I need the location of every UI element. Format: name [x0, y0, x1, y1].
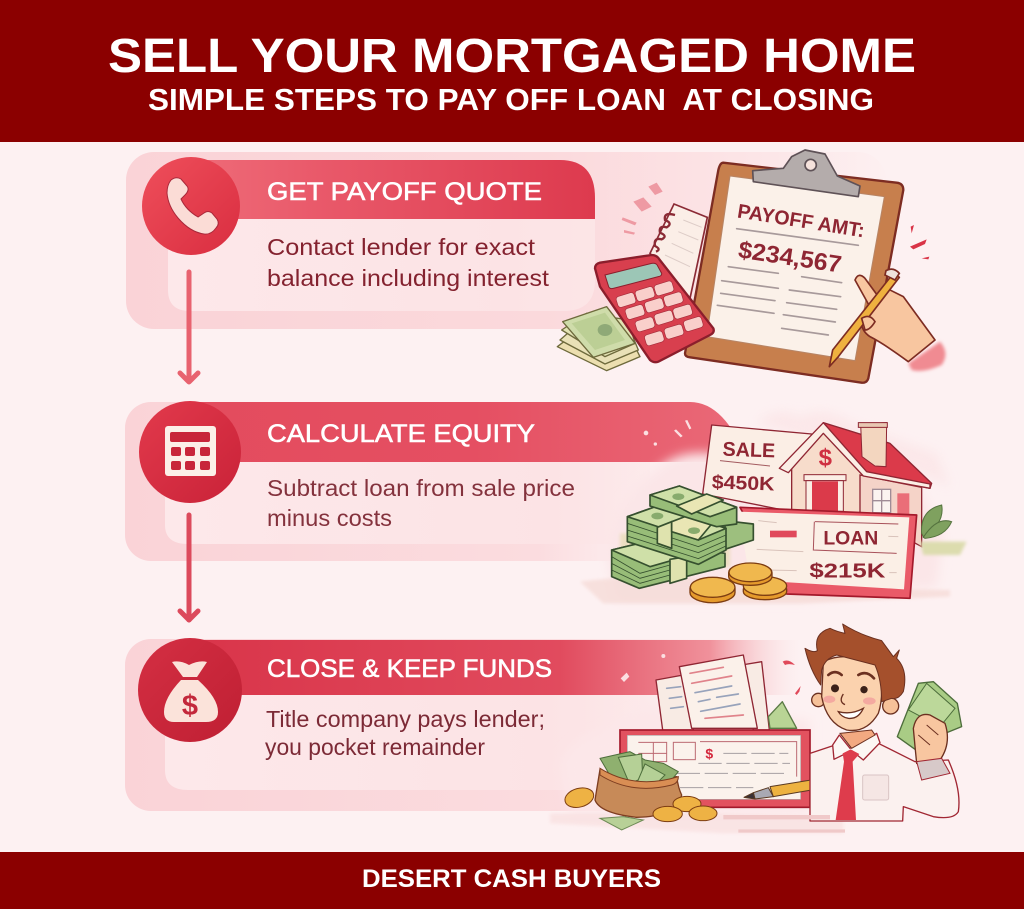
panel 1 description: Contact lender for exact [267, 234, 536, 260]
panel: step 3 close and keep funds [125, 638, 800, 811]
footer banner [0, 852, 1024, 909]
subtitle: SIMPLE STEPS TO PAY OFF LOAN AT CLOSING [148, 82, 874, 117]
panel 3 description: you pocket remainder [265, 734, 485, 760]
check [620, 730, 810, 807]
house [779, 423, 932, 547]
red calculator [595, 255, 714, 362]
cash stacks [612, 486, 753, 588]
motion marks [783, 661, 801, 695]
panel 2 description: minus costs [267, 505, 392, 531]
house: $ [819, 445, 832, 472]
panel 2 description [267, 475, 575, 531]
face and hair [805, 624, 905, 748]
desk shadow [723, 815, 845, 833]
panel 1 description [267, 234, 550, 291]
documents [656, 655, 797, 730]
arrow: step 1 to step 2 [180, 272, 198, 382]
panel 3 body card [165, 690, 640, 790]
panel 2 backing [125, 402, 715, 561]
pen [744, 779, 816, 799]
panel 3 description: Title company pays lender; [266, 706, 545, 732]
panel 2 heading: CALCULATE EQUITY [267, 420, 535, 448]
sale sign: SALE [722, 439, 776, 463]
panel 2 body card [165, 455, 650, 544]
soft background cloud [580, 411, 950, 603]
panel 1 heading: GET PAYOFF QUOTE [267, 178, 542, 206]
clipboard with payoff amount: PAYOFF AMT: [736, 201, 866, 242]
header banner [0, 0, 1024, 142]
check: $ [705, 745, 713, 761]
sparkle marks [644, 420, 691, 446]
shirt and tie [810, 733, 959, 821]
illustration: documents, check, money bag and smiling man [550, 624, 962, 833]
spiral notebook [650, 204, 707, 298]
coins and bill [563, 785, 717, 830]
panel 2 heading band [200, 402, 748, 462]
soft cloud [550, 707, 843, 833]
panel 2 description: Subtract loan from sale price [267, 475, 575, 501]
loan check: LOAN [823, 528, 878, 549]
panel 2 icon: calculator [139, 401, 241, 503]
panel 1 backing [126, 152, 886, 329]
sale sign: $450K [711, 472, 775, 496]
gold coins [690, 563, 787, 603]
panel 1 description: balance including interest [267, 265, 550, 291]
panel 3 description [265, 706, 545, 760]
panel 3 heading band [200, 640, 800, 695]
motion marks [622, 183, 929, 259]
panel 1 body card [168, 210, 595, 311]
loan check: $215K [809, 560, 885, 583]
clipboard with payoff amount [685, 150, 903, 383]
panel 3 backing [125, 639, 765, 811]
panel 3 heading: CLOSE & KEEP FUNDS [267, 655, 552, 683]
sale sign [703, 425, 812, 512]
money bag [595, 752, 682, 817]
panel 1 icon: phone [142, 157, 240, 255]
arrow: step 2 to step 3 [180, 515, 198, 620]
title: SELL YOUR MORTGAGED HOME [108, 30, 916, 83]
illustration: sale sign, house, loan check, cash and coins [580, 411, 967, 603]
brand name: DESERT CASH BUYERS [362, 865, 661, 893]
illustration: clipboard, calculator and cash [557, 150, 945, 383]
hand holding pencil [829, 269, 945, 371]
panel: step 1 get payoff quote [126, 152, 886, 329]
loan check [738, 507, 917, 598]
panel 1 heading band [200, 160, 595, 219]
clipboard with payoff amount: $234,567 [736, 237, 843, 279]
raised hand with cash [897, 682, 962, 780]
cash pile [557, 307, 640, 371]
panel 3 icon: money bag: $ [182, 690, 198, 722]
panel: step 2 calculate equity [125, 401, 748, 561]
panel 3 icon: money bag [138, 638, 242, 742]
bush [920, 505, 967, 555]
